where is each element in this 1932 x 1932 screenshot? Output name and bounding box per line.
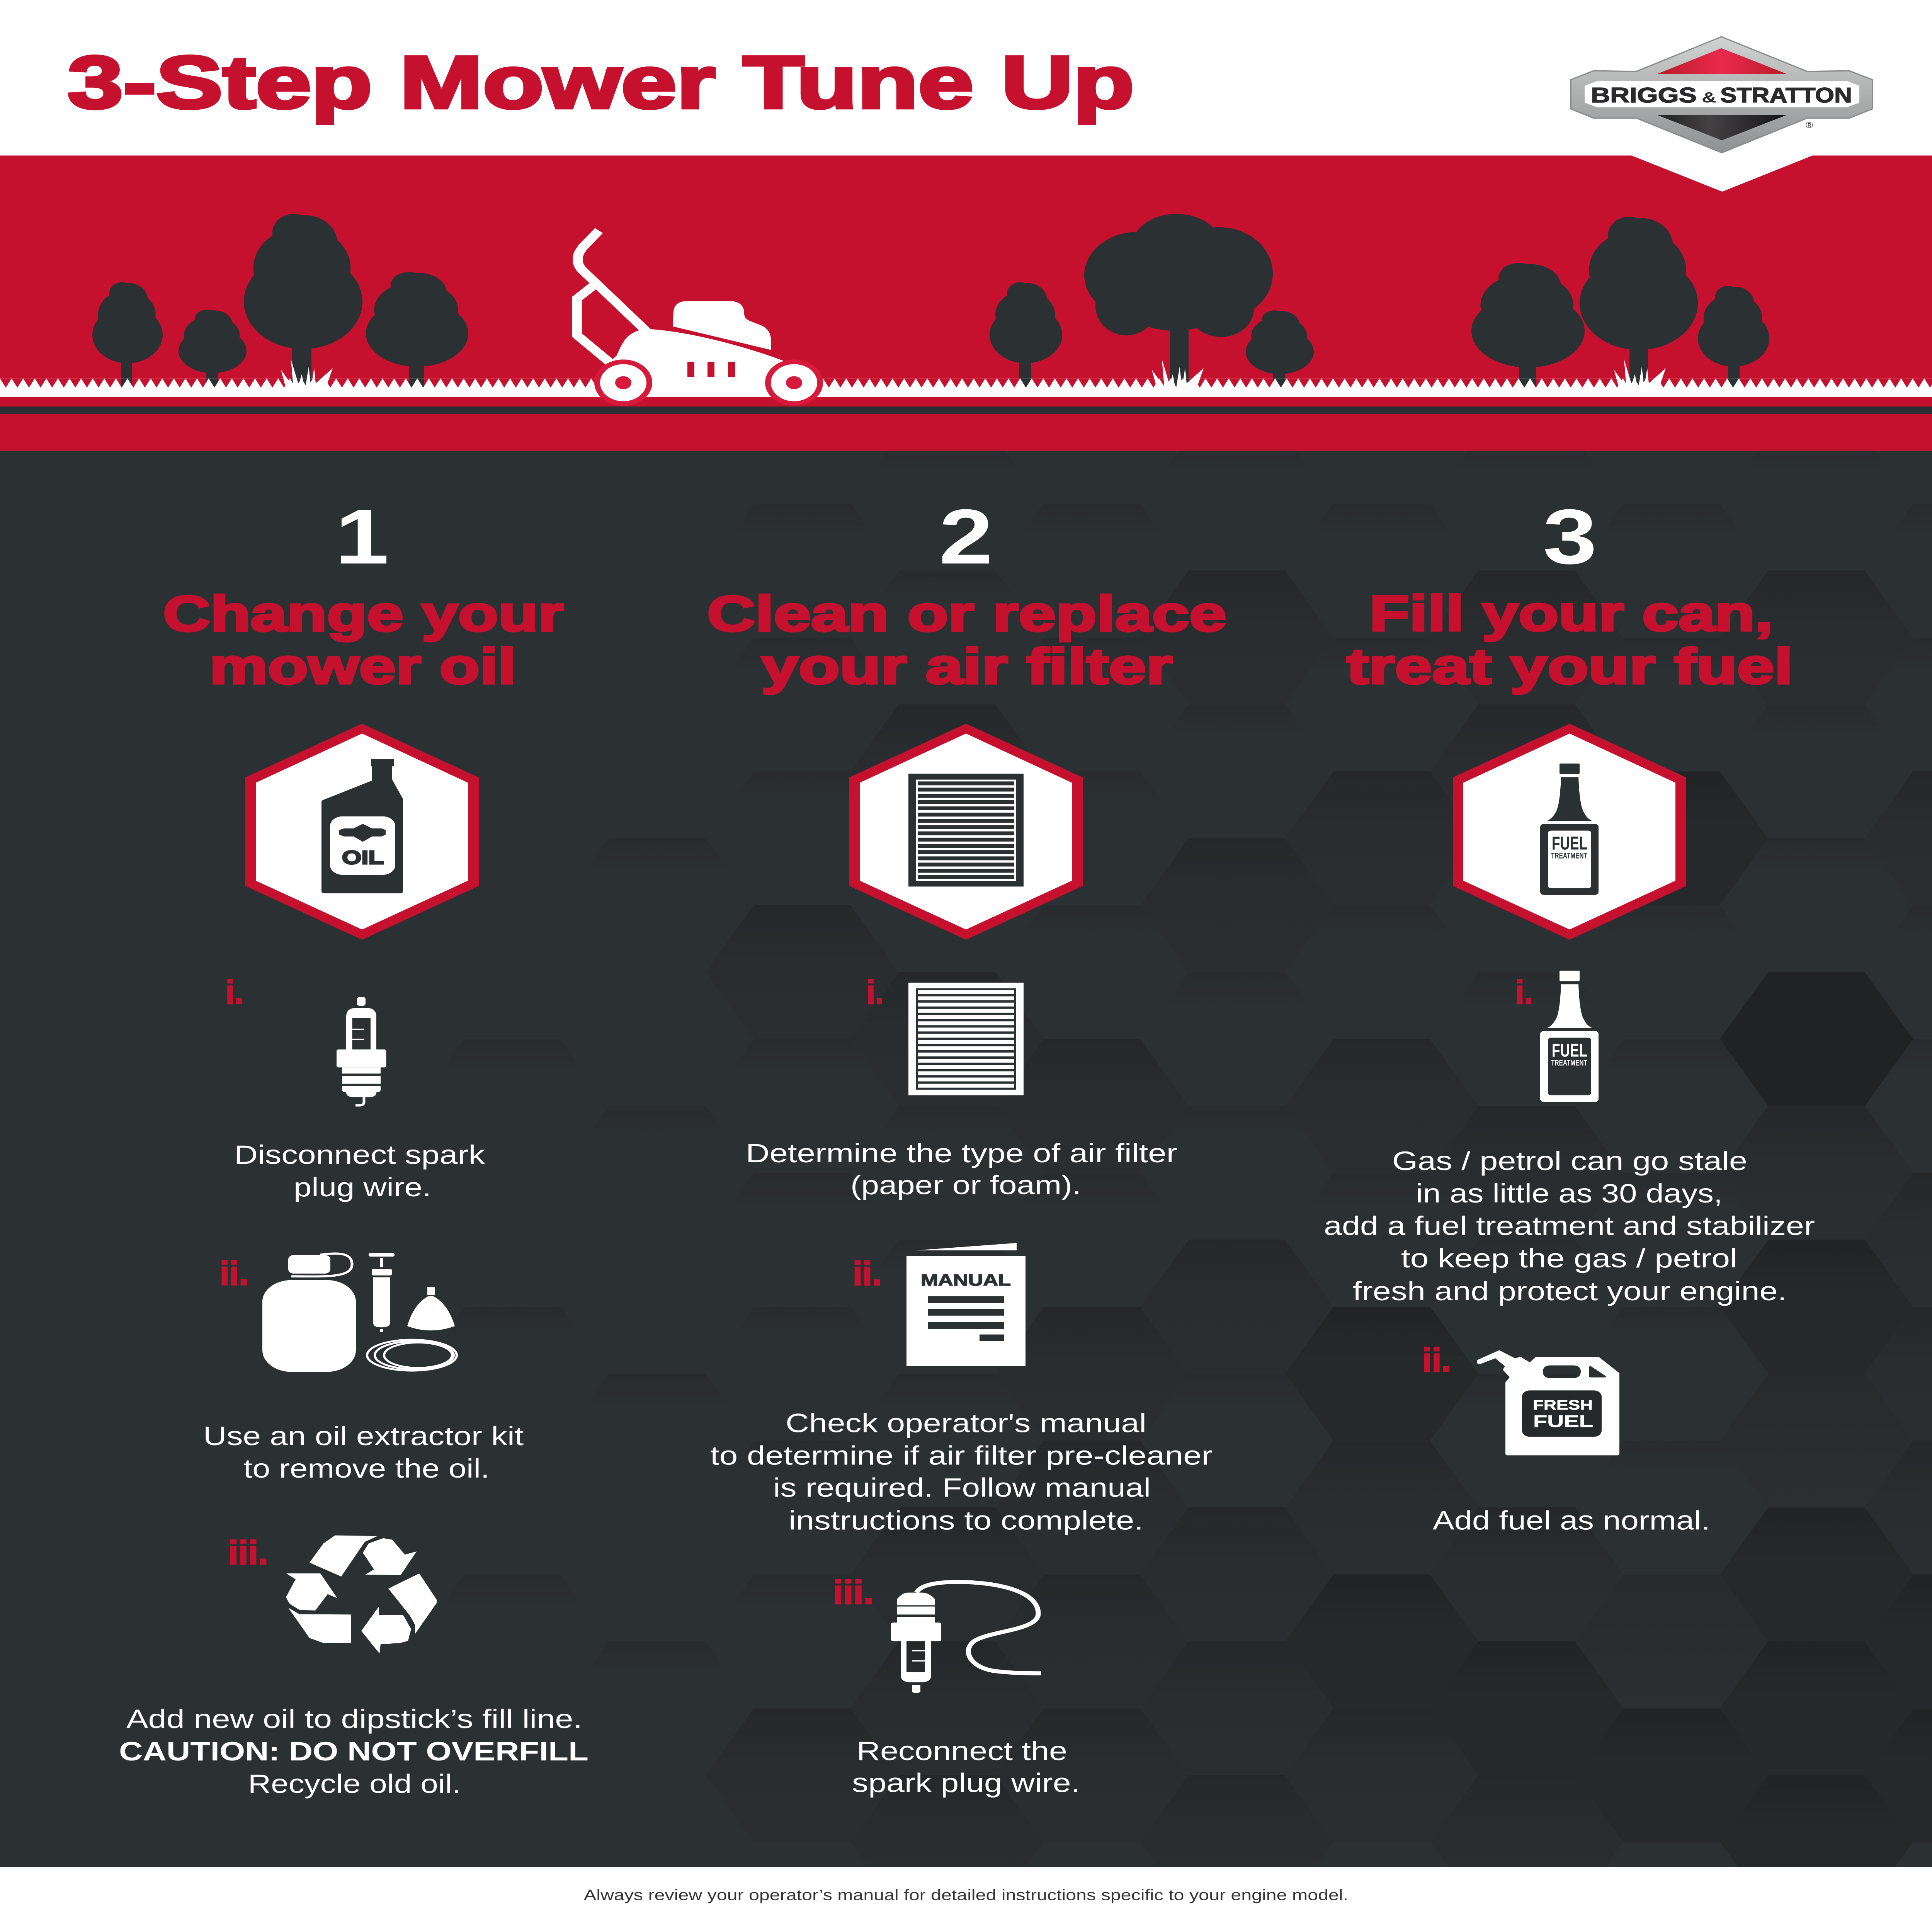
text: disconnect spark plug wire — [234, 1140, 485, 1202]
step number 2: 2 — [939, 493, 993, 580]
text: reconnect spark plug wire: spark plug wire. — [852, 1768, 1080, 1798]
icon: fresh fuel can — [1477, 1350, 1619, 1455]
hexagon badge: oil bottle — [245, 724, 479, 940]
icon: spark plug with wire — [891, 1582, 1041, 1693]
text: check operator's manual — [710, 1408, 1213, 1535]
text: add new oil and caution — [119, 1704, 588, 1799]
column 1: change your mower oil — [119, 493, 588, 1799]
icon: recycle arrows — [286, 1536, 437, 1653]
logo: Briggs & Stratton: STRATTON — [1720, 83, 1852, 107]
numeral i: i. — [1515, 973, 1533, 1011]
heading: clean or replace your air filter: your air filter — [761, 638, 1172, 694]
text: check operator's manual: Check operator's manual — [786, 1408, 1146, 1438]
logo: Briggs & Stratton: ® — [1806, 121, 1813, 130]
hexagon badge: air filter — [849, 724, 1083, 940]
text: gas can go stale: Gas / petrol can go stale — [1392, 1146, 1747, 1176]
heading: clean or replace your air filter: Clean or replace — [707, 586, 1226, 642]
heading: fill your can, treat your fuel: treat your fuel — [1347, 638, 1793, 694]
text: reconnect spark plug wire: Reconnect the — [857, 1736, 1067, 1766]
icon: air filter white — [908, 983, 1024, 1095]
numeral ii: ii. — [853, 1255, 882, 1292]
icon: manual booklet — [906, 1243, 1026, 1366]
header white band — [0, 0, 1932, 155]
icon: fuel treatment bottle white: FUEL — [1552, 1040, 1587, 1061]
numeral i: i. — [867, 973, 884, 1011]
dark road stripe — [0, 406, 1932, 414]
heading: clean or replace your air filter — [707, 586, 1226, 694]
text: add fuel as normal: Add fuel as normal. — [1433, 1506, 1710, 1535]
icon: fresh fuel can: FRESH — [1533, 1398, 1593, 1413]
footer band — [0, 1867, 1932, 1932]
column 3: fill your can, treat your fuel — [1324, 493, 1815, 1535]
title: 3-Step Mower Tune Up — [68, 41, 1134, 124]
logo: Briggs & Stratton: & — [1702, 89, 1716, 106]
text: disconnect spark plug wire: plug wire. — [294, 1172, 431, 1202]
hexagon badge: oil bottle: OIL — [342, 847, 384, 868]
numeral iii: iii. — [228, 1534, 268, 1571]
numeral i: i. — [226, 973, 243, 1011]
text: check operator's manual: instructions to complete. — [789, 1506, 1143, 1535]
heading: fill your can, treat your fuel — [1347, 585, 1793, 694]
text: gas can go stale — [1324, 1146, 1815, 1306]
text: use an oil extractor kit — [203, 1421, 524, 1483]
icon: fuel treatment bottle white: TREATMENT — [1551, 1058, 1587, 1068]
text: use an oil extractor kit: Use an oil extractor kit — [203, 1421, 524, 1451]
text: use an oil extractor kit: to remove the oil. — [243, 1454, 490, 1483]
heading: change your mower oil: Change your — [163, 586, 564, 642]
text: disconnect spark plug wire: Disconnect spark — [234, 1140, 485, 1170]
red banner with logo notch — [0, 155, 1932, 451]
numeral iii: iii. — [833, 1573, 874, 1611]
icon: manual booklet: MANUAL — [921, 1271, 1011, 1289]
logo: Briggs & Stratton: BRIGGS — [1591, 83, 1697, 107]
text: add new oil and caution: CAUTION: DO NOT OVERFILL — [119, 1736, 588, 1766]
icon: fuel treatment bottle white — [1540, 971, 1599, 1102]
trees — [92, 214, 1769, 388]
text: gas can go stale: fresh and protect your engine. — [1353, 1276, 1787, 1306]
hexagon badge: fuel treatment bottle: FUEL — [1552, 833, 1587, 854]
text: check operator's manual: to determine if air filter pre-cleaner — [710, 1441, 1213, 1470]
logo: Briggs & Stratton — [1571, 37, 1872, 153]
grass strip — [0, 359, 1932, 397]
footer note: Always review your operator’s manual for detailed instructions specific to your engine model. — [584, 1887, 1348, 1903]
heading: change your mower oil — [163, 586, 564, 694]
hexagon badge: fuel treatment bottle: TREATMENT — [1551, 851, 1587, 861]
heading: change your mower oil: mower oil — [209, 638, 516, 694]
text: add new oil and caution: Add new oil to dipstick’s fill line. — [126, 1704, 582, 1734]
text: gas can go stale: to keep the gas / petrol — [1401, 1243, 1737, 1273]
text: determine filter type — [746, 1138, 1177, 1200]
heading: fill your can, treat your fuel: Fill your can, — [1369, 585, 1773, 641]
dark hexagon background panel — [0, 437, 1932, 1909]
lawn mower — [577, 231, 823, 406]
column 2: clean or replace your air filter — [707, 493, 1226, 1798]
text: gas can go stale: add a fuel treatment and stabilizer — [1324, 1211, 1815, 1241]
icon: oil extractor kit — [262, 1253, 457, 1372]
text: determine filter type: (paper or foam). — [850, 1170, 1081, 1200]
text: determine filter type: Determine the type of air filter — [746, 1138, 1177, 1168]
step number 1: 1 — [335, 493, 389, 580]
text: check operator's manual: is required. Follow manual — [773, 1473, 1151, 1503]
icon: spark plug — [337, 997, 386, 1105]
numeral ii: ii. — [1422, 1341, 1451, 1379]
text: add new oil and caution: Recycle old oil. — [248, 1769, 461, 1799]
icon: fresh fuel can: FUEL — [1533, 1412, 1593, 1431]
step number 3: 3 — [1543, 493, 1597, 580]
text: reconnect spark plug wire — [852, 1736, 1080, 1798]
numeral ii: ii. — [220, 1254, 248, 1292]
text: gas can go stale: in as little as 30 days, — [1416, 1179, 1723, 1208]
hexagon badge: fuel treatment bottle — [1453, 724, 1686, 940]
